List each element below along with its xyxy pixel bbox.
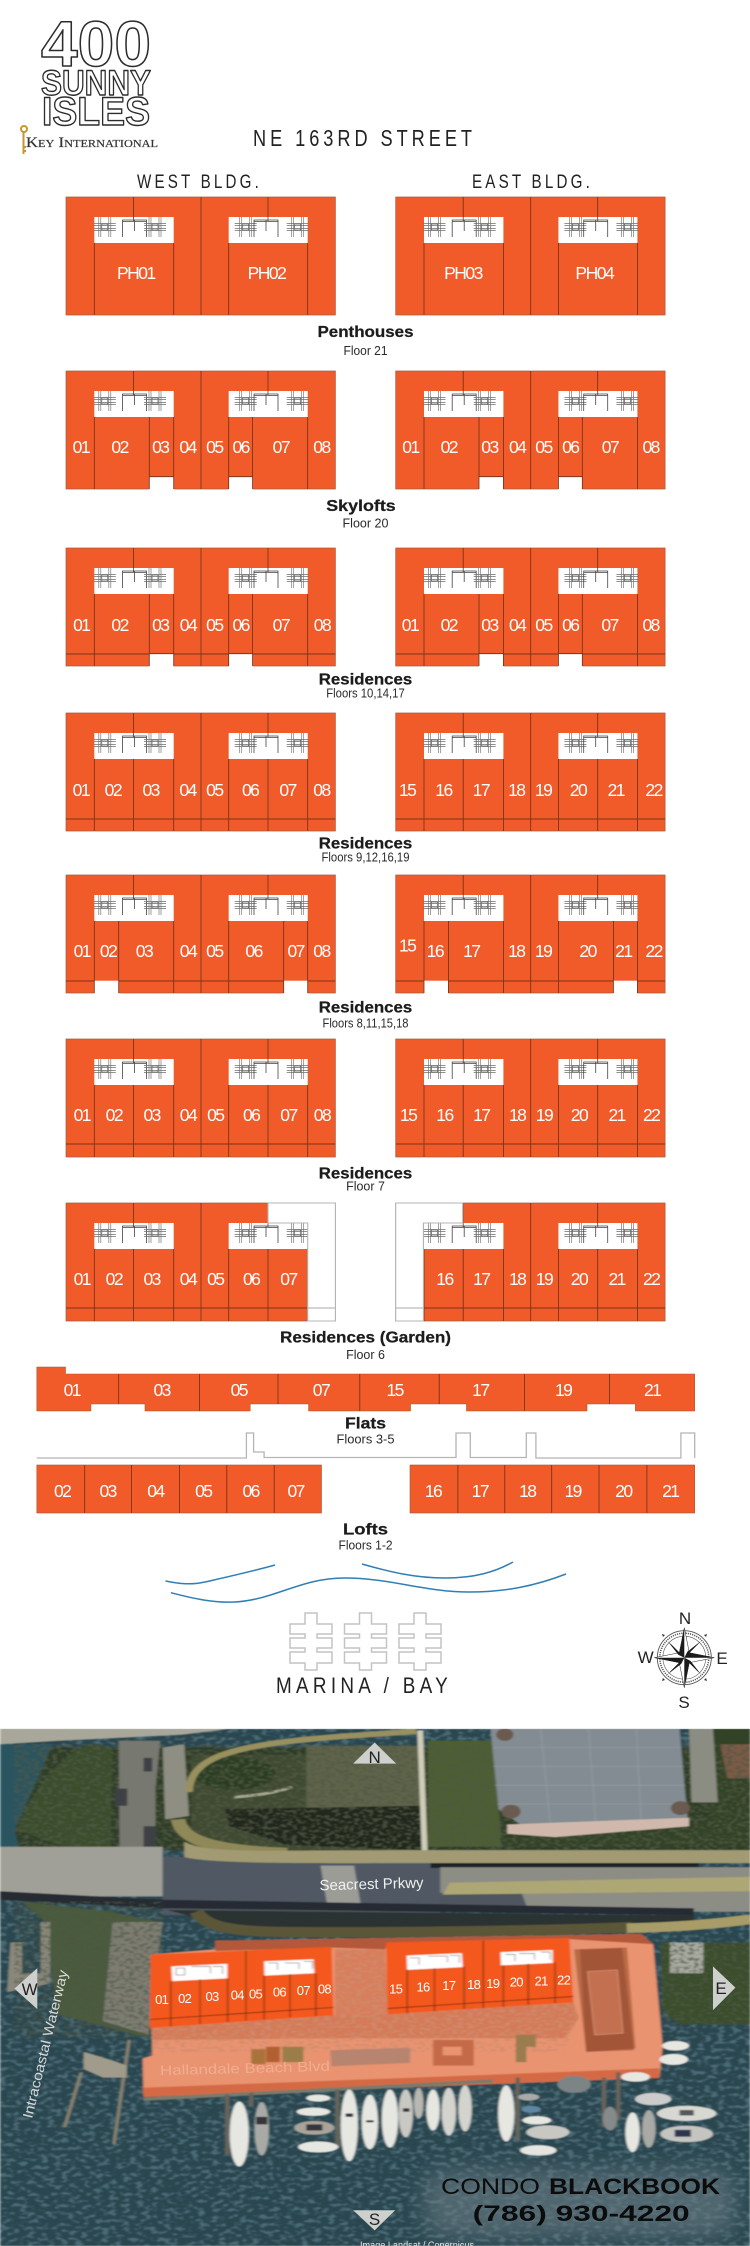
unit numbers: 05	[207, 1269, 224, 1289]
unit numbers: 07	[273, 615, 290, 635]
unit numbers: 07	[287, 941, 305, 961]
unit numbers: 04	[180, 1269, 198, 1289]
unit numbers on aerial: 17	[442, 1978, 456, 1993]
unit numbers: PH02	[248, 263, 286, 283]
unit numbers on aerial: 18	[467, 1977, 481, 1992]
unit numbers: 04	[180, 615, 198, 635]
unit numbers: 15	[400, 1105, 417, 1125]
unit numbers	[74, 1269, 660, 1289]
unit numbers: 21	[662, 1481, 679, 1501]
sublabel: Floor 21	[344, 344, 388, 358]
compass star	[654, 1628, 714, 1688]
unit numbers: 06	[243, 1269, 260, 1289]
unit numbers: 19	[535, 780, 552, 800]
unit numbers: 18	[509, 1269, 526, 1289]
heading: east building: EAST BLDG.	[472, 172, 593, 193]
unit numbers: 01	[73, 780, 90, 800]
unit numbers on aerial: 02	[178, 1991, 192, 2006]
unit numbers	[73, 780, 663, 800]
unit numbers on aerial: 05	[249, 1986, 262, 2001]
west plate	[66, 713, 335, 831]
waterway label: Intracoastal Waterway	[19, 1968, 71, 2120]
unit numbers: 08	[313, 437, 330, 457]
phone number: (786) 930-4220	[473, 2201, 690, 2226]
unit numbers on aerial: 01	[155, 1992, 169, 2007]
unit numbers: 02	[105, 780, 122, 800]
west plate	[66, 1039, 335, 1157]
panel: aerial photo	[0, 1728, 750, 2246]
direction triangles	[14, 1742, 735, 2230]
unit numbers: 02	[441, 437, 458, 457]
unit numbers: 19	[564, 1481, 582, 1501]
unit numbers: 05	[206, 780, 223, 800]
unit numbers	[74, 1105, 660, 1125]
glow behind contact	[425, 2170, 735, 2236]
unit numbers: 03	[142, 780, 160, 800]
unit numbers: 07	[602, 437, 619, 457]
unit numbers: 06	[232, 437, 250, 457]
unit numbers: 18	[508, 941, 525, 961]
unit numbers: 05	[231, 1380, 248, 1400]
unit numbers: PH04	[575, 263, 615, 283]
map direction letters: S	[369, 2210, 380, 2229]
label: Flats	[345, 1416, 386, 1432]
unit numbers: 22	[645, 780, 663, 800]
unit numbers on aerial: 07	[297, 1983, 310, 1998]
unit numbers: 02	[441, 615, 458, 635]
unit numbers: 19	[555, 1380, 572, 1400]
sublabel: Floors 10,14,17	[326, 686, 405, 700]
unit numbers: 08	[642, 437, 660, 457]
unit numbers: 06	[242, 1481, 260, 1501]
unit numbers: 21	[608, 780, 625, 800]
label: Residences (Garden)	[280, 1330, 451, 1346]
unit numbers: 04	[180, 1105, 198, 1125]
unit numbers: 16	[436, 1105, 453, 1125]
unit numbers: 17	[472, 1380, 489, 1400]
unit numbers: 07	[280, 1269, 297, 1289]
sublabel: Floors 3-5	[336, 1432, 395, 1446]
unit numbers: 22	[643, 1105, 660, 1125]
logo number 400: 400	[41, 8, 151, 80]
unit numbers: 06	[243, 1105, 260, 1125]
unit numbers: 06	[242, 780, 259, 800]
label: Residences	[319, 672, 412, 688]
panel: residences floors 10,14,17	[66, 548, 665, 700]
street name: NE 163RD STREET	[253, 125, 476, 151]
label: Residences	[319, 1000, 412, 1016]
unit numbers: 05	[207, 1105, 224, 1125]
unit numbers: 01	[64, 1380, 81, 1400]
unit numbers: 01	[402, 437, 419, 457]
sublabel: Floor 7	[346, 1180, 385, 1194]
unit numbers: 07	[280, 1105, 297, 1125]
unit numbers: 15	[386, 1380, 404, 1400]
flats plate	[37, 1367, 695, 1411]
orange plates	[150, 1947, 334, 2028]
faded boulevard label: Hallandale Beach Blvd	[160, 2058, 330, 2078]
unit numbers: 05	[206, 941, 223, 961]
unit numbers: 07	[601, 615, 619, 635]
west plate	[66, 197, 335, 315]
unit numbers on aerial: 16	[416, 1980, 430, 1995]
unit numbers: 03	[136, 941, 153, 961]
compass ticks	[662, 1634, 707, 1681]
west plate	[66, 875, 335, 995]
unit numbers: 02	[111, 437, 129, 457]
unit numbers: 05	[206, 437, 223, 457]
unit numbers: 18	[508, 780, 525, 800]
east plate	[396, 548, 665, 668]
unit numbers: 16	[436, 1269, 453, 1289]
unit numbers	[64, 1380, 661, 1400]
unit numbers: 21	[615, 941, 632, 961]
unit numbers: 04	[509, 615, 527, 635]
label: Skylofts	[326, 498, 396, 515]
brand word condo: CONDO	[441, 2174, 540, 2199]
unit numbers: 03	[481, 437, 498, 457]
unit numbers: 06	[245, 941, 263, 961]
unit numbers: 22	[645, 941, 663, 961]
east plate	[396, 371, 665, 491]
unit numbers: 17	[473, 1269, 490, 1289]
unit numbers: 20	[570, 780, 588, 800]
aerial base map	[0, 1728, 750, 2246]
unit numbers	[117, 263, 615, 283]
unit numbers: 18	[509, 1105, 526, 1125]
unit numbers: 02	[54, 1481, 71, 1501]
unit numbers: 20	[571, 1105, 589, 1125]
unit numbers: 03	[152, 437, 169, 457]
unit numbers: PH01	[117, 263, 156, 283]
logo: 400 Sunny Isles	[21, 8, 158, 154]
label: Residences	[319, 836, 412, 852]
west plate	[66, 1203, 335, 1321]
unit numbers on aerial: 03	[205, 1989, 219, 2004]
unit numbers on aerial: 21	[535, 1973, 548, 1988]
map direction letters: W	[22, 1980, 38, 1999]
east plate	[396, 1039, 665, 1157]
panel: residences floors 9,12,16,19	[66, 713, 665, 864]
unit numbers: 17	[473, 780, 490, 800]
unit numbers	[54, 1481, 679, 1501]
compass letters: W	[638, 1648, 654, 1667]
unit numbers: 20	[579, 941, 598, 961]
label: Lofts	[343, 1522, 388, 1538]
west lofts plate	[37, 1465, 322, 1513]
unit numbers: 07	[273, 437, 290, 457]
unit numbers	[73, 615, 660, 635]
icon: water waves	[166, 1562, 566, 1602]
unit numbers: 08	[313, 941, 330, 961]
unit numbers: 17	[473, 1105, 490, 1125]
unit numbers: 08	[642, 615, 660, 635]
icon: marina piers	[290, 1613, 441, 1670]
unit numbers: 19	[535, 941, 552, 961]
unit numbers on aerial: 19	[486, 1976, 500, 1991]
unit numbers: 18	[519, 1481, 536, 1501]
unit numbers	[73, 437, 660, 457]
unit numbers: 01	[402, 615, 419, 635]
unit numbers: 02	[106, 1269, 123, 1289]
icon: gold key	[21, 126, 27, 154]
unit numbers: 16	[425, 1481, 442, 1501]
unit numbers: 07	[279, 780, 297, 800]
unit numbers: 06	[562, 437, 579, 457]
icon: compass rose	[638, 1609, 728, 1712]
panel: residences garden floor 6	[66, 1203, 665, 1362]
unit numbers on aerial: 22	[557, 1972, 571, 1987]
panel: flats floors 3-5	[37, 1367, 695, 1446]
unit numbers: 03	[99, 1481, 117, 1501]
unit numbers: 17	[472, 1481, 489, 1501]
unit numbers on aerial	[155, 1972, 571, 2007]
unit numbers: 01	[73, 437, 90, 457]
unit numbers: 03	[143, 1105, 161, 1125]
unit numbers: 03	[152, 615, 169, 635]
unit numbers: 19	[536, 1105, 553, 1125]
map direction letters: E	[715, 1979, 727, 1998]
map direction letters: N	[368, 1748, 381, 1767]
label: Residences	[319, 1166, 412, 1182]
unit numbers: 01	[74, 941, 91, 961]
sublabel: Floors 9,12,16,19	[322, 850, 410, 864]
panel: penthouses floor 21	[66, 197, 665, 358]
unit numbers: 06	[232, 615, 250, 635]
west plate	[66, 548, 335, 668]
unit numbers: 15	[399, 936, 416, 956]
unit numbers: 08	[314, 1105, 331, 1125]
unit numbers: 02	[111, 615, 129, 635]
logo word ISLES: ISLES	[42, 90, 150, 134]
label: Penthouses	[318, 324, 414, 341]
unit numbers: 15	[399, 780, 416, 800]
unit numbers: 19	[536, 1269, 553, 1289]
compass letters	[638, 1609, 728, 1712]
east plate	[396, 197, 665, 315]
docks	[144, 2081, 493, 2099]
east plate	[396, 875, 665, 995]
east plate	[396, 1203, 665, 1321]
unit numbers: PH03	[444, 263, 483, 283]
unit numbers: 01	[73, 615, 90, 635]
unit numbers: 05	[206, 615, 223, 635]
marina label: MARINA / BAY	[276, 1673, 452, 1698]
sublabel: Floors 1-2	[338, 1538, 393, 1552]
unit numbers: 20	[571, 1269, 589, 1289]
unit numbers on aerial: 08	[318, 1982, 331, 1997]
unit numbers: 20	[615, 1481, 633, 1501]
unit numbers: 03	[153, 1380, 171, 1400]
panel: residences floor 7	[66, 1039, 665, 1194]
unit numbers: 01	[74, 1105, 91, 1125]
heading: west building: WEST BLDG.	[137, 172, 262, 193]
unit numbers: 21	[644, 1380, 661, 1400]
compass letters: E	[716, 1649, 728, 1668]
compass rings	[657, 1631, 711, 1685]
unit numbers: 22	[643, 1269, 660, 1289]
contact: condo blackbook	[441, 2174, 720, 2226]
unit numbers: 21	[608, 1105, 626, 1125]
compass letters: N	[679, 1609, 691, 1628]
unit numbers: 08	[313, 780, 330, 800]
map direction letters	[22, 1748, 727, 2229]
brand word blackbook: BLACKBOOK	[549, 2174, 720, 2199]
road label: Seacrest Prkwy	[319, 1875, 424, 1894]
logo word SUNNY: SUNNY	[41, 64, 151, 103]
unit numbers: 07	[313, 1380, 330, 1400]
unit numbers	[74, 936, 663, 961]
unit numbers on aerial: 06	[273, 1984, 286, 1999]
salmon site overlay	[143, 1934, 663, 2096]
unit numbers: 04	[179, 437, 198, 457]
unit numbers: 01	[74, 1269, 91, 1289]
unit numbers on aerial: 20	[510, 1974, 523, 1989]
unit numbers: 04	[509, 437, 527, 457]
boats	[230, 2041, 716, 2166]
east lofts plate	[410, 1465, 695, 1513]
unit numbers: 05	[535, 615, 552, 635]
unit numbers: 04	[147, 1481, 165, 1501]
unit numbers: 04	[180, 941, 198, 961]
unit numbers: 02	[100, 941, 117, 961]
unit numbers: 07	[287, 1481, 305, 1501]
unit numbers: 16	[435, 780, 452, 800]
unit numbers on aerial: 04	[231, 1987, 244, 2002]
unit numbers: 02	[106, 1105, 123, 1125]
unit numbers: 08	[314, 615, 331, 635]
east plate	[396, 713, 665, 831]
west plate	[66, 371, 335, 491]
panel: lofts floors 1-2	[37, 1465, 695, 1552]
panel: skylofts floor 20	[66, 371, 665, 530]
sublabel: Floor 6	[346, 1348, 385, 1362]
unit numbers: 03	[143, 1269, 161, 1289]
sublabel: Floor 20	[342, 516, 389, 530]
compass letters: S	[678, 1693, 690, 1712]
unit numbers on aerial: 15	[389, 1981, 403, 1996]
unit numbers: 05	[535, 437, 552, 457]
unit numbers: 06	[562, 615, 579, 635]
unit numbers: 17	[463, 941, 480, 961]
panel: residences floors 8,11,15,18	[66, 875, 665, 1030]
unit numbers: 16	[427, 941, 444, 961]
unit numbers: 21	[608, 1269, 626, 1289]
unit numbers: 04	[179, 780, 198, 800]
developer name: Key International	[26, 135, 158, 151]
unit numbers: 05	[195, 1481, 212, 1501]
unit numbers: 03	[481, 615, 498, 635]
sublabel: Floors 8,11,15,18	[322, 1016, 409, 1030]
